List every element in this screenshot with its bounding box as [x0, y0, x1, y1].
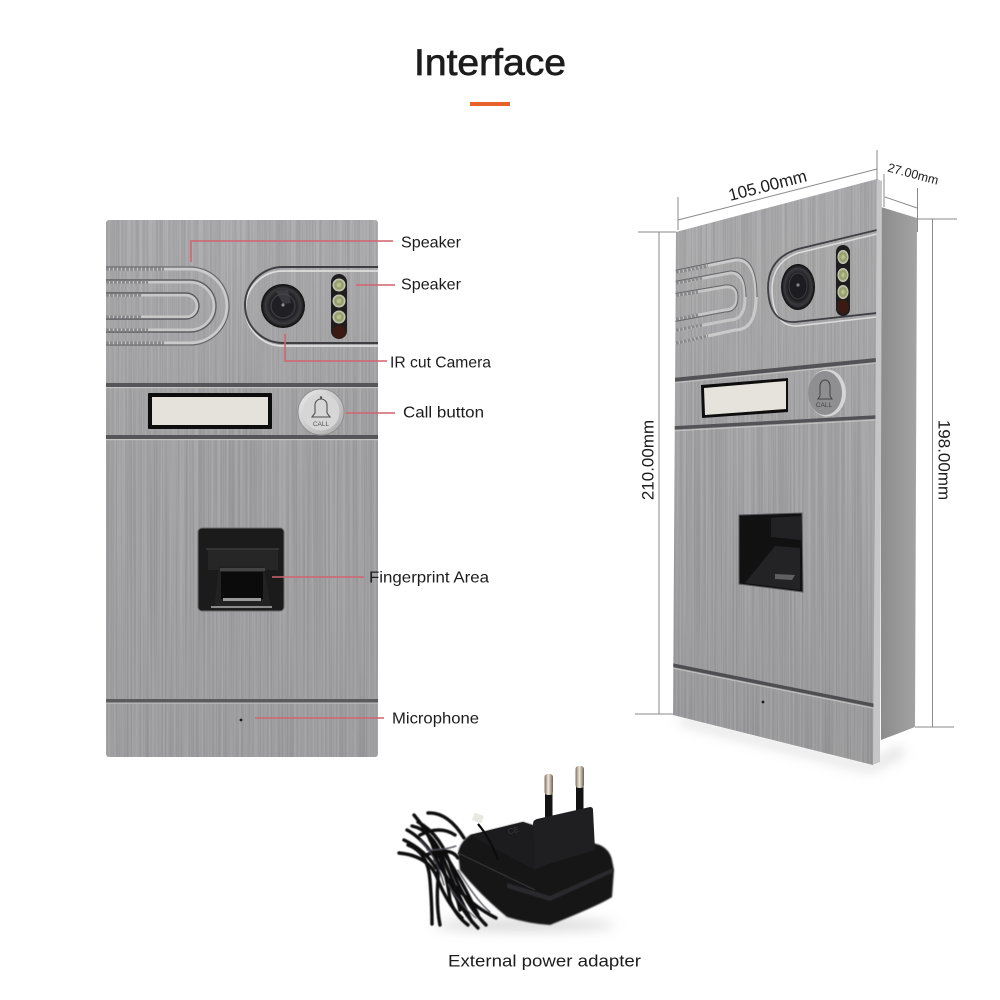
camera lens: [261, 284, 305, 328]
callout: speaker second: Speaker: [401, 276, 462, 294]
callout: IR cut camera: IR cut Camera: [390, 354, 491, 372]
front face: [673, 179, 877, 765]
floor shadow: [680, 716, 905, 772]
callout: IR cut camera: [285, 334, 491, 372]
name plate: [148, 393, 272, 429]
dimension: height 198.00mm: 198.00mm: [934, 420, 954, 500]
callout: speaker second: [356, 276, 462, 294]
wire over body: [478, 824, 498, 860]
dimension: depth 27.00mm: [884, 161, 940, 232]
perspective lens: [781, 264, 815, 310]
perspective speaker grille: [672, 258, 757, 344]
callout: speaker top: [191, 234, 462, 262]
dimension: height 210.00mm: 210.00mm: [638, 420, 658, 500]
dimension: width 105.00mm: [678, 150, 877, 230]
dimension: depth 27.00mm: 27.00mm: [886, 161, 940, 188]
adapter body: [458, 822, 614, 925]
microphone hole: [240, 719, 242, 721]
callout: call button: Call button: [403, 404, 484, 422]
adapter shadow: [435, 919, 615, 931]
front edge: [872, 179, 882, 765]
call button: [298, 389, 344, 435]
title accent bar: [470, 102, 510, 106]
title: Interface: [414, 42, 566, 83]
callout: speaker top: Speaker: [401, 234, 462, 252]
caption: external power adapter: External power adapter: [448, 952, 642, 970]
side face: [881, 207, 917, 740]
grooves: [106, 383, 378, 704]
dimension: height 198.00mm: [915, 219, 957, 727]
dimension: height 210.00mm: [635, 232, 676, 714]
icon: power adapter: [399, 766, 615, 931]
camera recess: [245, 267, 378, 346]
perspective LED strip: [836, 245, 850, 316]
perspective fingerprint reader: [739, 513, 803, 592]
perspective call button: CALL: [816, 402, 833, 409]
perspective camera recess: [768, 230, 877, 326]
panel: front view of door station: [106, 220, 378, 757]
IR LED strip: [331, 274, 347, 339]
fingerprint reader: [198, 528, 284, 611]
speaker grille: [106, 267, 229, 345]
dimension: width 105.00mm: 105.00mm: [726, 166, 809, 205]
white connector: [472, 813, 484, 823]
perspective call button: [808, 370, 846, 416]
perspective name plate: [701, 378, 788, 418]
perspective microphone hole: [762, 701, 764, 703]
call button: CALL: [313, 421, 330, 428]
panel: perspective view of door station: [670, 175, 917, 772]
cable bundle: [399, 813, 496, 928]
callout: fingerprint area: Fingerprint Area: [369, 570, 489, 586]
callout: microphone: Microphone: [392, 710, 479, 728]
plug prongs: [545, 792, 552, 822]
plug face: [533, 807, 595, 868]
perspective grooves: [672, 360, 877, 709]
callout: call button: [346, 404, 484, 422]
icon: power adapter: CE: [507, 825, 520, 836]
